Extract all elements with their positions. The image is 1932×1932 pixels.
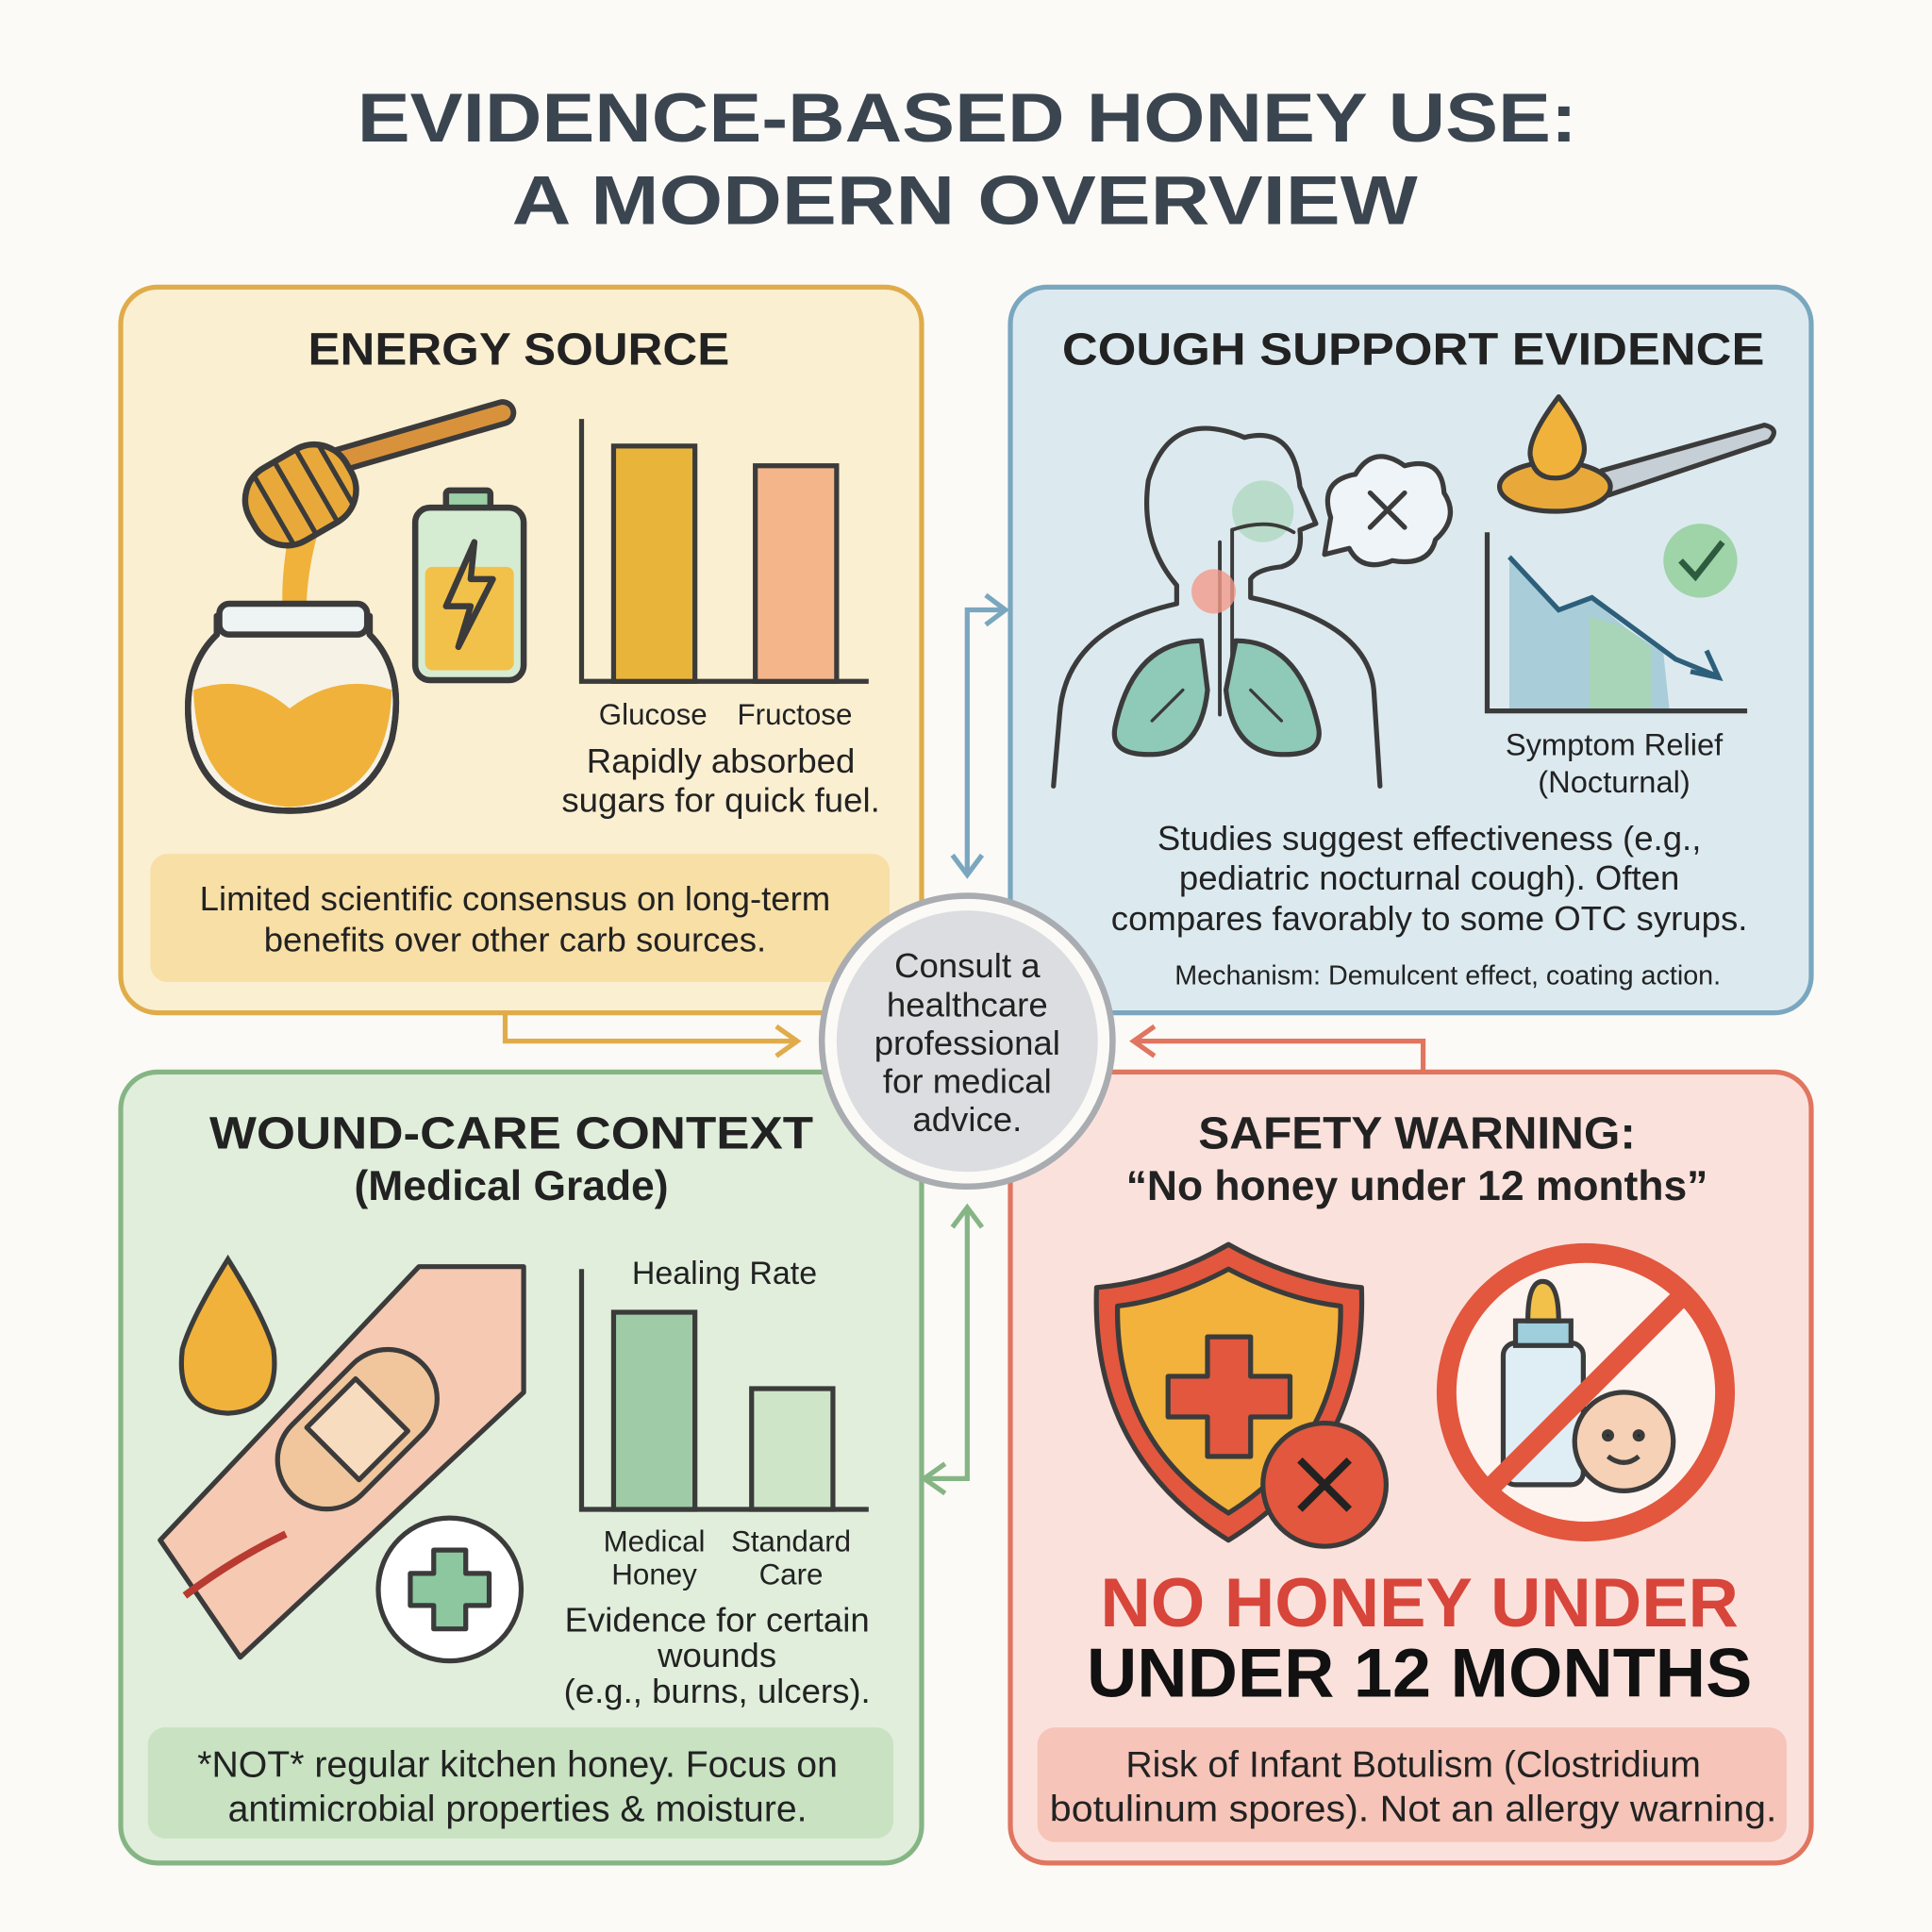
text: cough evidence xyxy=(1111,819,1747,991)
chart: symptom relief: (Nocturnal) xyxy=(1538,764,1690,799)
chart: symptom relief xyxy=(1487,524,1747,799)
bar chart: sugars xyxy=(581,419,869,731)
arrow: energy to center xyxy=(506,1013,797,1056)
chart: symptom relief: Symptom Relief xyxy=(1506,727,1724,762)
arrow: center to wound xyxy=(924,1208,982,1493)
heading: wound care: (Medical Grade) xyxy=(355,1163,669,1209)
panel: safety warning xyxy=(1010,1072,1811,1863)
text: cough evidence: pediatric nocturnal cough). Often xyxy=(1179,858,1679,897)
text: wound evidence: Evidence for certain xyxy=(565,1600,870,1639)
text: wound evidence: (e.g., burns, ulcers). xyxy=(564,1672,871,1710)
callout: botulism note xyxy=(1038,1727,1787,1842)
heading: safety warning: “No honey under 12 months” xyxy=(1126,1163,1707,1209)
bar chart: healing rate: Care xyxy=(759,1558,823,1591)
text: rapid sugars: Rapidly absorbed xyxy=(587,741,855,780)
arrow: cough to center xyxy=(953,595,1006,874)
title: EVIDENCE-BASED HONEY USE: xyxy=(358,80,1577,157)
callout: energy note: benefits over other carb sources. xyxy=(264,920,766,958)
text: cough evidence: compares favorably to some OTC syrups. xyxy=(1111,899,1747,938)
title xyxy=(358,80,1577,240)
callout: consult professional: healthcare xyxy=(887,986,1048,1024)
callout: consult professional xyxy=(822,896,1112,1187)
callout: consult professional: Consult a xyxy=(894,946,1041,985)
heading: safety warning: SAFETY WARNING: xyxy=(1198,1108,1636,1158)
icon: honey drop xyxy=(181,1259,275,1413)
text: no honey under 12 months: UNDER 12 MONTHS xyxy=(1087,1636,1752,1712)
title: A MODERN OVERVIEW xyxy=(512,163,1418,240)
callout: wound note: *NOT* regular kitchen honey. Focus on xyxy=(197,1744,838,1785)
bar chart: sugars: Glucose xyxy=(599,698,708,731)
heading: wound care xyxy=(209,1108,813,1209)
icon: person with lungs xyxy=(1054,428,1450,786)
text: rapid sugars: sugars for quick fuel. xyxy=(561,781,880,820)
heading: energy source: ENERGY SOURCE xyxy=(308,325,729,375)
text: no honey under 12 months: NO HONEY UNDER xyxy=(1100,1565,1739,1641)
heading: safety warning xyxy=(1126,1108,1707,1209)
text: wound evidence xyxy=(564,1600,871,1710)
bar chart: healing rate: Standard xyxy=(731,1524,851,1557)
callout: energy note: Limited scientific consensus on long-term xyxy=(200,879,830,918)
text: rapid sugars xyxy=(561,741,880,820)
arrow: safety to center xyxy=(1134,1026,1424,1072)
bar chart: healing rate: Medical xyxy=(604,1524,706,1557)
bar chart: healing rate: Healing Rate xyxy=(632,1256,817,1291)
bar chart: healing rate: Honey xyxy=(611,1558,697,1591)
callout: wound note: antimicrobial properties & moisture. xyxy=(228,1789,808,1829)
bar chart: healing rate xyxy=(581,1256,869,1591)
panel: wound care xyxy=(121,1072,922,1863)
callout: consult professional: professional xyxy=(874,1024,1060,1062)
icon: battery xyxy=(415,491,524,680)
text: cough evidence: Mechanism: Demulcent effect, coating action. xyxy=(1174,961,1721,991)
bar chart: sugars: Fructose xyxy=(738,698,852,731)
icon: honey spoon xyxy=(1500,397,1774,511)
text: no honey under 12 months xyxy=(1087,1565,1752,1712)
icon: no baby bottle xyxy=(1446,1253,1725,1532)
callout: consult professional: advice. xyxy=(912,1100,1022,1139)
heading: cough support: COUGH SUPPORT EVIDENCE xyxy=(1062,325,1764,375)
panel: cough support xyxy=(1010,287,1811,1013)
callout: wound note xyxy=(148,1727,893,1839)
callout: energy note xyxy=(150,854,890,982)
icon: arm with bandage xyxy=(160,1267,524,1661)
text: cough evidence: Studies suggest effectiveness (e.g., xyxy=(1158,819,1701,858)
icon: honey jar with dipper xyxy=(188,413,503,810)
text: wound evidence: wounds xyxy=(657,1636,776,1674)
heading: wound care: WOUND-CARE CONTEXT xyxy=(209,1108,813,1158)
callout: consult professional: for medical xyxy=(883,1062,1052,1101)
icon: shield xyxy=(1096,1244,1386,1546)
panel: energy source xyxy=(121,287,922,1013)
callout: botulism note: botulinum spores). Not an allergy warning. xyxy=(1050,1789,1776,1829)
callout: botulism note: Risk of Infant Botulism (Clostridium xyxy=(1125,1744,1701,1785)
